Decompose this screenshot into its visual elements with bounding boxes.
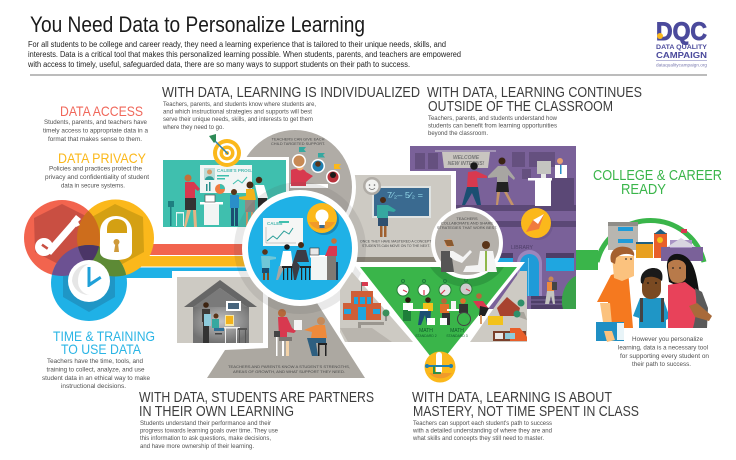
intro text: interests. Data is a critical tool that makes this personalized learning possible. When students, parents, and teachers are empowered [28, 50, 461, 59]
panel: individualized learning scene [160, 126, 356, 248]
intro text: For all students to be college and career ready, they need a learning experience that is tailored to their unique needs, skills, and [28, 40, 446, 49]
teal classroom panel [160, 157, 289, 230]
icon group: key, lock and clock circles [24, 200, 154, 321]
panel: neighbourhood with bus [470, 271, 527, 342]
heading: learning is individualized: WITH DATA, LEARNING IS INDIVIDUALIZED [162, 84, 420, 101]
student at blackboard [377, 197, 396, 237]
teacher right [463, 241, 497, 272]
logo: Data Quality Campaign: CAMPAIGN [656, 50, 707, 60]
paper [294, 320, 302, 330]
reception desk [528, 158, 574, 206]
text: partners description [140, 420, 278, 450]
text: partners description: this information to ask questions, make decisions, [140, 435, 271, 442]
text: outside classroom description: beyond the classroom. [428, 130, 488, 137]
blackboard: 7⁄₂– 5⁄₂ = [387, 191, 423, 200]
heading: learning continues outside the classroom: OUTSIDE OF THE CLASSROOM [428, 98, 613, 115]
text: outside classroom description: students can benefit from learning opportunities [428, 122, 557, 130]
teal classroom panel: CALEB'S PROG. [217, 168, 252, 173]
intro text [27, 40, 461, 69]
boy in blue [230, 189, 239, 226]
man in orange [304, 317, 327, 356]
white circle: teachers collaborate: COLLABORATE AND SHARE [441, 220, 493, 226]
library building: LIBRARY [511, 245, 533, 251]
student: boy in orange [596, 247, 634, 342]
pillar: time and training [42, 328, 155, 390]
teacher in grey [488, 158, 515, 205]
text: mastery description: Teachers can support each student's path to success [413, 420, 552, 427]
pillar: data access [43, 103, 148, 143]
math labels: MATH [450, 328, 464, 334]
grey trapezoid: teachers and parents: AREAS OF GROWTH, AND WHAT SUPPORT THEY NEED. [233, 369, 345, 374]
pillar: data access: timely access to appropriate data in a [43, 128, 148, 134]
student climbing library steps [545, 276, 557, 304]
student: girl in red with backpack [667, 254, 712, 328]
caption: however you personalize: However you personalize [632, 336, 703, 343]
text: partners description: Students understand their performance and their [140, 420, 272, 427]
heading: mastery not time [412, 389, 639, 420]
college and career heading [593, 167, 722, 198]
panel: classroom with blackboard: ONCE THEY HAVE MASTERED A CONCEPT, [360, 238, 432, 244]
text: mastery description: what skills and concepts they still need to master. [412, 435, 544, 442]
woman in yellow [239, 182, 256, 226]
logo: Data Quality Campaign: DATA QUALITY [656, 45, 707, 51]
intro text: with access to timely, useful, safeguarded data, there are so many ways to support students on their path to success. [27, 60, 410, 69]
text: individualized description: serve their unique needs, skills, and interests to get them [163, 116, 313, 123]
text: partners description: progress towards learning goals over time. They use [140, 428, 278, 434]
title: You Need Data to Personalize Learning [30, 12, 365, 37]
seated student group [261, 242, 311, 280]
welcome banner: WELCOME [453, 155, 480, 161]
panel: school neighbourhood [340, 272, 413, 342]
caption: however you personalize [618, 336, 709, 368]
woman on stool [274, 309, 296, 356]
text: individualized description: and which instructional strategies and supports will best [163, 108, 312, 116]
heading: learning continues outside the classroom: WITH DATA, LEARNING CONTINUES [427, 84, 642, 101]
student in red shaking hands [462, 162, 487, 205]
caption: however you personalize: learning, data is a necessary tool [618, 344, 708, 352]
logo: Data Quality Campaign [656, 18, 708, 68]
logo: Data Quality Campaign: dataqualitycampaign.org [656, 62, 708, 68]
caption: however you personalize: their path to success. [632, 361, 691, 368]
grey circle: targeted support [234, 126, 356, 248]
caption: however you personalize: for supporting every student on [620, 353, 709, 360]
math labels: MATH [419, 328, 433, 334]
math labels: STANDARD 3 [446, 334, 468, 338]
library building [498, 245, 576, 309]
panel: partners in learning scene [172, 273, 365, 378]
icon: lightbulb [307, 203, 339, 235]
heading: students are partners [139, 389, 374, 420]
brick building [493, 328, 527, 341]
school bus [488, 316, 503, 325]
heading: students are partners: IN THEIR OWN LEARNING [139, 403, 294, 420]
pillar: data privacy: Policies and practices protect the [49, 166, 142, 172]
student tables [403, 293, 489, 326]
heading: students are partners: WITH DATA, STUDENTS ARE PARTNERS [139, 389, 374, 406]
panel: classroom with blackboard [340, 171, 456, 266]
grey trapezoid: teachers and parents: TEACHERS AND PARENTS KNOW A STUDENT'S STRENGTHS, [228, 364, 350, 369]
stools [168, 201, 184, 226]
wall frames [415, 152, 555, 179]
icon: clock [68, 260, 110, 302]
pillar: time and training: TO USE DATA [61, 341, 142, 357]
grey circle: targeted support: CHILD TARGETED SUPPORT. [271, 141, 325, 146]
heading: mastery not time: MASTERY, NOT TIME SPENT IN CLASS [413, 403, 639, 420]
math labels [415, 328, 468, 338]
man in white [255, 177, 268, 208]
pillar: time and training: training to collect, analyze, and use [46, 366, 145, 374]
pillar: data privacy [45, 150, 149, 190]
teacher in red [184, 174, 200, 227]
icon: mastery pipe badge [424, 352, 456, 382]
grey trapezoid: teachers and parents [207, 297, 365, 378]
pillar: time and training: TIME & TRAINING [53, 328, 155, 344]
pillar: time and training: instructional decisions. [61, 383, 126, 390]
stopwatches [397, 278, 472, 296]
coloured bands [110, 244, 250, 278]
text: mastery description [412, 420, 552, 442]
blue circle: data dashboard scene [234, 182, 366, 314]
college buildings [608, 222, 703, 261]
pillar: data access: Students, parents, and teachers have [44, 119, 147, 126]
welcome banner [435, 151, 496, 168]
pillar: data privacy: privacy and confidentiality of student [45, 174, 149, 181]
welcome banner: NEW INTERNS! [448, 161, 485, 167]
icon: compass [521, 208, 553, 240]
panel: classroom with blackboard: STUDENTS CAN MOVE ON TO THE NEXT. [362, 243, 430, 248]
text: partners description: and have more ownership of their learning. [140, 443, 254, 450]
grey circle: targeted support: TEACHERS CAN GIVE EACH [272, 136, 325, 142]
icon: target with arrow [209, 134, 241, 167]
heading: mastery not time: WITH DATA, LEARNING IS ABOUT [412, 389, 612, 406]
math labels: STANDARD 2 [415, 334, 437, 338]
white circle: teachers collaborate: TEACHERS [456, 216, 478, 221]
pillar: data access: DATA ACCESS [60, 103, 143, 119]
pillar: data privacy: data in secure systems. [61, 182, 125, 190]
text: individualized description: Teachers, parents, and students know where students are, [163, 101, 316, 108]
text: mastery description: with a detailed understanding of where they are and [412, 428, 552, 434]
logo: Data Quality Campaign: DQC [656, 18, 707, 46]
table with laptop [200, 195, 223, 225]
pillar: data access: format that makes sense to them. [48, 136, 142, 143]
green triangle: mastery classroom [355, 262, 525, 356]
teacher at desk [310, 238, 338, 280]
whiteboard chart: CALEB [267, 221, 283, 226]
student: boy in blue [633, 268, 670, 328]
text: outside classroom description: Teachers, parents, and students understand how [428, 115, 557, 122]
white circle: teachers collaborate: STRATEGIES THAT WORK BEST. [437, 225, 497, 230]
text: individualized description: where they need to go. [162, 124, 224, 131]
panel: purple out-of-classroom scene [410, 146, 576, 309]
white circle: teachers collaborate [431, 207, 503, 279]
house [497, 297, 520, 316]
text: outside classroom description [428, 115, 557, 137]
college and career heading: READY [621, 181, 666, 198]
panel: college and career ready scene [576, 221, 712, 342]
icon: smiley [363, 177, 381, 195]
heading: learning continues outside the classroom [427, 84, 642, 115]
icon: padlock [100, 216, 132, 260]
school building [343, 282, 390, 321]
pillar: time and training: student data in an ethical way to make [42, 375, 150, 382]
text: individualized description [162, 101, 316, 131]
house panel [172, 273, 268, 348]
pillar: time and training: Teachers have the time, tools, and [47, 358, 143, 365]
pillar: data privacy: DATA PRIVACY [58, 150, 147, 166]
icon: key [35, 215, 81, 256]
green arc and connector [576, 221, 704, 270]
teacher left [441, 239, 472, 272]
